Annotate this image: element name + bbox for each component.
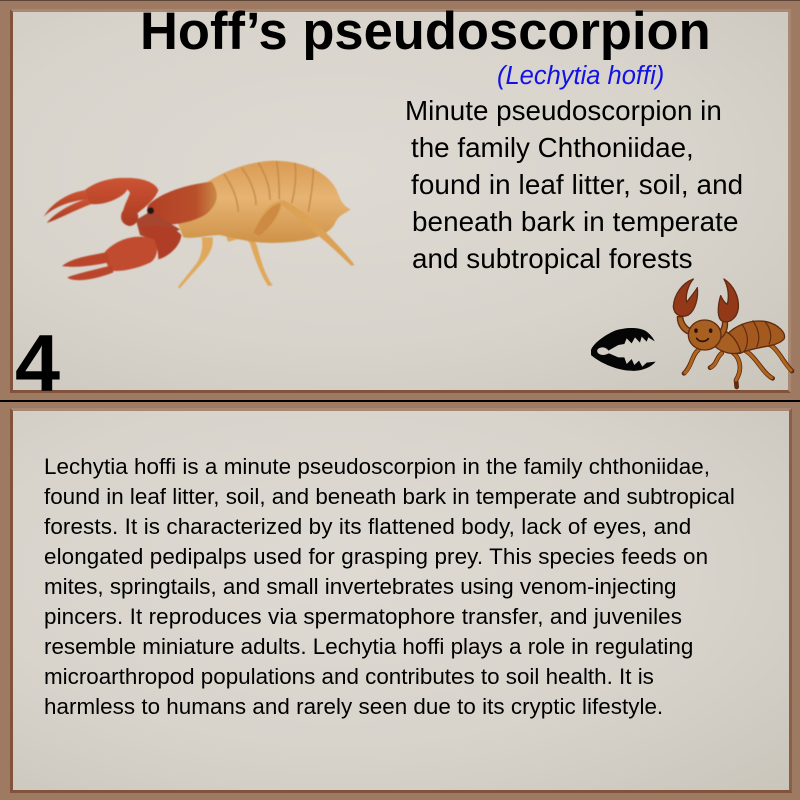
summary text: Minute pseudoscorpion in	[405, 95, 722, 126]
body text: forests. It is characterized by its flattened body, lack of eyes, and	[44, 514, 691, 539]
arms	[677, 317, 694, 335]
abdomen	[177, 161, 351, 243]
legs fill	[685, 343, 791, 380]
right claw	[718, 279, 738, 322]
left claw	[673, 279, 698, 316]
summary text: beneath bark in temperate	[412, 206, 739, 237]
illustration: pseudoscorpion	[44, 160, 355, 289]
panel: top card	[0, 0, 800, 400]
head	[688, 320, 721, 350]
summary text: and subtropical forests	[412, 243, 693, 274]
title: Hoff’s pseudoscorpion	[140, 2, 711, 61]
legs outline	[684, 343, 792, 387]
abdomen	[726, 321, 784, 354]
summary text: found in leaf litter, soil, and	[411, 169, 743, 200]
summary text: the family Chthoniidae,	[411, 132, 694, 163]
icon: pincer claw	[591, 328, 656, 371]
icon: cartoon pseudoscorpion	[672, 278, 794, 390]
rear leg	[253, 200, 354, 266]
summary text	[405, 95, 743, 274]
legs	[178, 223, 273, 289]
thorax	[715, 328, 741, 354]
abdomen segments	[224, 161, 313, 212]
scientific name: (Lechytia hoffi)	[497, 62, 664, 90]
card number: 4	[15, 319, 60, 409]
body text: pincers. It reproduces via spermatophore transfer, and juveniles	[44, 604, 682, 629]
panel: bottom card	[0, 402, 800, 800]
body text: Lechytia hoffi is a minute pseudoscorpion in the family chthoniidae,	[44, 454, 710, 479]
body text: microarthropod populations and contributes to soil health. It is	[44, 664, 654, 689]
body text: elongated pedipalps used for grasping prey. This species feeds on	[44, 544, 708, 569]
body text: found in leaf litter, soil, and beneath bark in temperate and subtropical	[44, 484, 735, 509]
body text	[44, 454, 735, 719]
upper pincer	[44, 178, 158, 226]
body text: harmless to humans and rarely seen due to its cryptic lifestyle.	[44, 694, 663, 719]
face	[694, 328, 698, 333]
cephalothorax	[147, 182, 217, 225]
body text: resemble miniature adults. Lechytia hoffi plays a role in regulating	[44, 634, 693, 659]
eye	[147, 207, 154, 214]
body text: mites, springtails, and small invertebrates using venom-injecting	[44, 574, 676, 599]
lower pincer	[62, 212, 181, 280]
